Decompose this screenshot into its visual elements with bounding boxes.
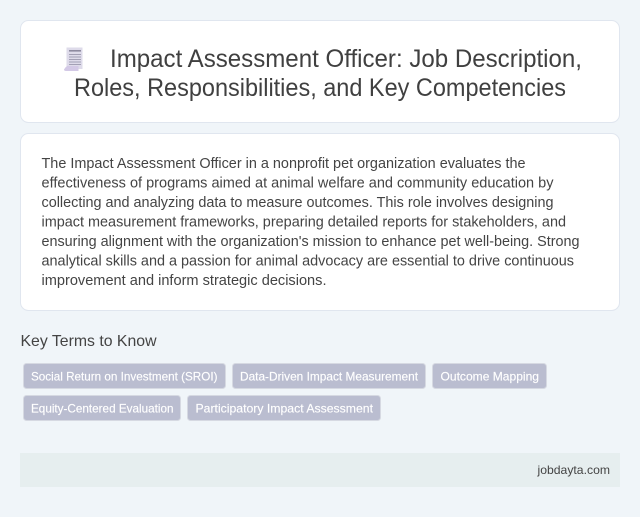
chip group: key terms [24, 364, 546, 420]
text block: description: impact measurement frameworks, preparing detailed reports for stakeholders, and [42, 214, 566, 230]
heading: key terms: Key Terms to Know [20, 333, 157, 350]
text block: description: analytical skills and a passion for animal advocacy are essential to drive continuous [42, 254, 574, 270]
chip: participatory [188, 396, 380, 420]
text block: description: improvement and inform strategic decisions. [42, 273, 326, 289]
title: Roles, Responsibilities, and Key Competencies [74, 74, 566, 102]
chip: SROI: Social Return on Investment (SROI) [31, 370, 218, 384]
title [74, 45, 582, 102]
footer source: jobdayta.com [536, 463, 610, 477]
text block: description: The Impact Assessment Officer in a nonprofit pet organization evaluates the [42, 156, 526, 172]
chip: outcome mapping [432, 364, 546, 388]
footer bar [20, 453, 620, 487]
chip: participatory: Participatory Impact Assessment [196, 402, 374, 416]
panel: title card [20, 20, 620, 122]
chip: equity-centered: Equity-Centered Evaluation [31, 402, 174, 416]
chip: data-driven: Data-Driven Impact Measurement [240, 370, 419, 384]
text block: description: effectiveness of programs aimed at animal welfare and community education by [42, 176, 554, 192]
text block: description: ensuring alignment with the organization's mission to enhance pet well-being. Strong [42, 234, 580, 250]
text block: description: collecting and analyzing data to measure outcomes. This role involves designing [42, 195, 554, 211]
chip: data-driven [232, 364, 426, 388]
chip: outcome mapping: Outcome Mapping [440, 370, 539, 384]
title: Impact Assessment Officer: Job Description, [110, 45, 582, 73]
icon: document scroll [64, 48, 82, 71]
chip: SROI [24, 364, 226, 388]
panel: job description [20, 134, 620, 310]
text block: description [42, 156, 580, 289]
chip: equity-centered [24, 396, 180, 420]
